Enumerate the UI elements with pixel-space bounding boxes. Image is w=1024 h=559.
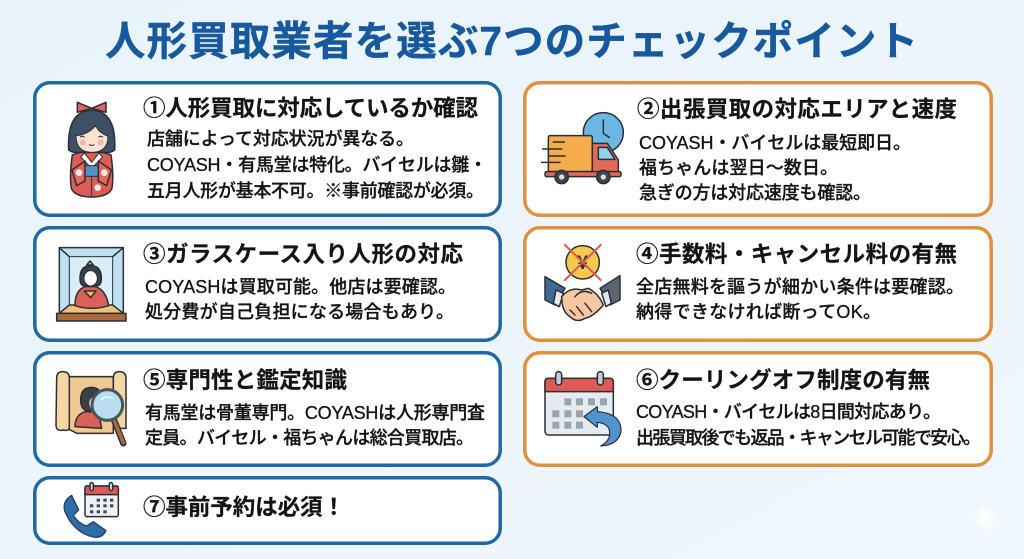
body text: 有馬堂は骨董専門。COYASHは人形専門査 <box>145 403 485 423</box>
body text: 急ぎの方は対応速度も確認。 <box>639 183 871 203</box>
body text <box>147 128 487 201</box>
panel 5: expertise <box>35 353 500 465</box>
body text: 福ちゃんは翌日〜数日。 <box>639 158 838 178</box>
panel 2: visit buying area and speed <box>525 83 991 215</box>
body text <box>639 133 911 203</box>
icon: kimono doll <box>69 102 115 197</box>
body text: 定員。バイセル・福ちゃんは総合買取店。 <box>145 428 474 448</box>
body text: 出張買取後でも返品・キャンセル可能で安心。 <box>636 428 981 448</box>
icon: delivery truck with clock <box>542 113 623 184</box>
icon: calendar with return arrow <box>545 372 621 446</box>
body text: 処分費が自己負担になる場合もあり。 <box>145 301 454 322</box>
body text: COYASH・有馬堂は特化。バイセルは雛・ <box>147 155 487 175</box>
body text <box>145 277 456 322</box>
heading: ④手数料・キャンセル料の有無 <box>636 242 957 267</box>
body text: 五月人形が基本不可。※事前確認が必須。 <box>147 180 484 201</box>
body text <box>145 403 485 448</box>
sparkle mark <box>971 503 999 534</box>
icon: doll in glass case <box>57 248 126 321</box>
body text: 納得できなければ断ってOK。 <box>636 302 881 322</box>
heading: ②出張買取の対応エリアと速度 <box>637 97 957 122</box>
body text: COYASHは買取可能。他店は要確認。 <box>145 277 456 297</box>
heading: ⑦事前予約は必須！ <box>143 495 345 520</box>
body text <box>636 402 981 448</box>
body text: COYASH・バイセルは8日間対応あり。 <box>636 402 941 422</box>
panel 4: fees <box>525 228 991 340</box>
heading: ⑥クーリングオフ制度の有無 <box>636 367 930 393</box>
panel 3: glass case dolls <box>35 228 500 340</box>
body text <box>636 276 964 322</box>
panel 7: advance booking <box>35 478 500 543</box>
heading: ①人形買取に対応しているか確認 <box>143 96 478 121</box>
body text: COYASH・バイセルは最短即日。 <box>639 133 911 153</box>
body text: 店舗によって対応状況が異なる。 <box>147 128 414 149</box>
icon: handshake with crossed yen: ¥ <box>577 253 588 274</box>
heading: ⑤専門性と鑑定知識 <box>143 368 347 393</box>
panel 6: cooling-off <box>525 353 991 465</box>
body text: 全店無料を謳うが細かい条件は要確認。 <box>636 276 964 297</box>
icon: phone and calendar <box>64 483 118 537</box>
panel 1: doll buying support <box>35 83 500 215</box>
title: 人形買取業者を選ぶ7つのチェックポイント <box>105 18 918 64</box>
icon: scroll with magnifier <box>56 372 126 443</box>
heading: ③ガラスケース入り人形の対応 <box>143 242 463 267</box>
icon: handshake with crossed yen <box>545 245 620 320</box>
